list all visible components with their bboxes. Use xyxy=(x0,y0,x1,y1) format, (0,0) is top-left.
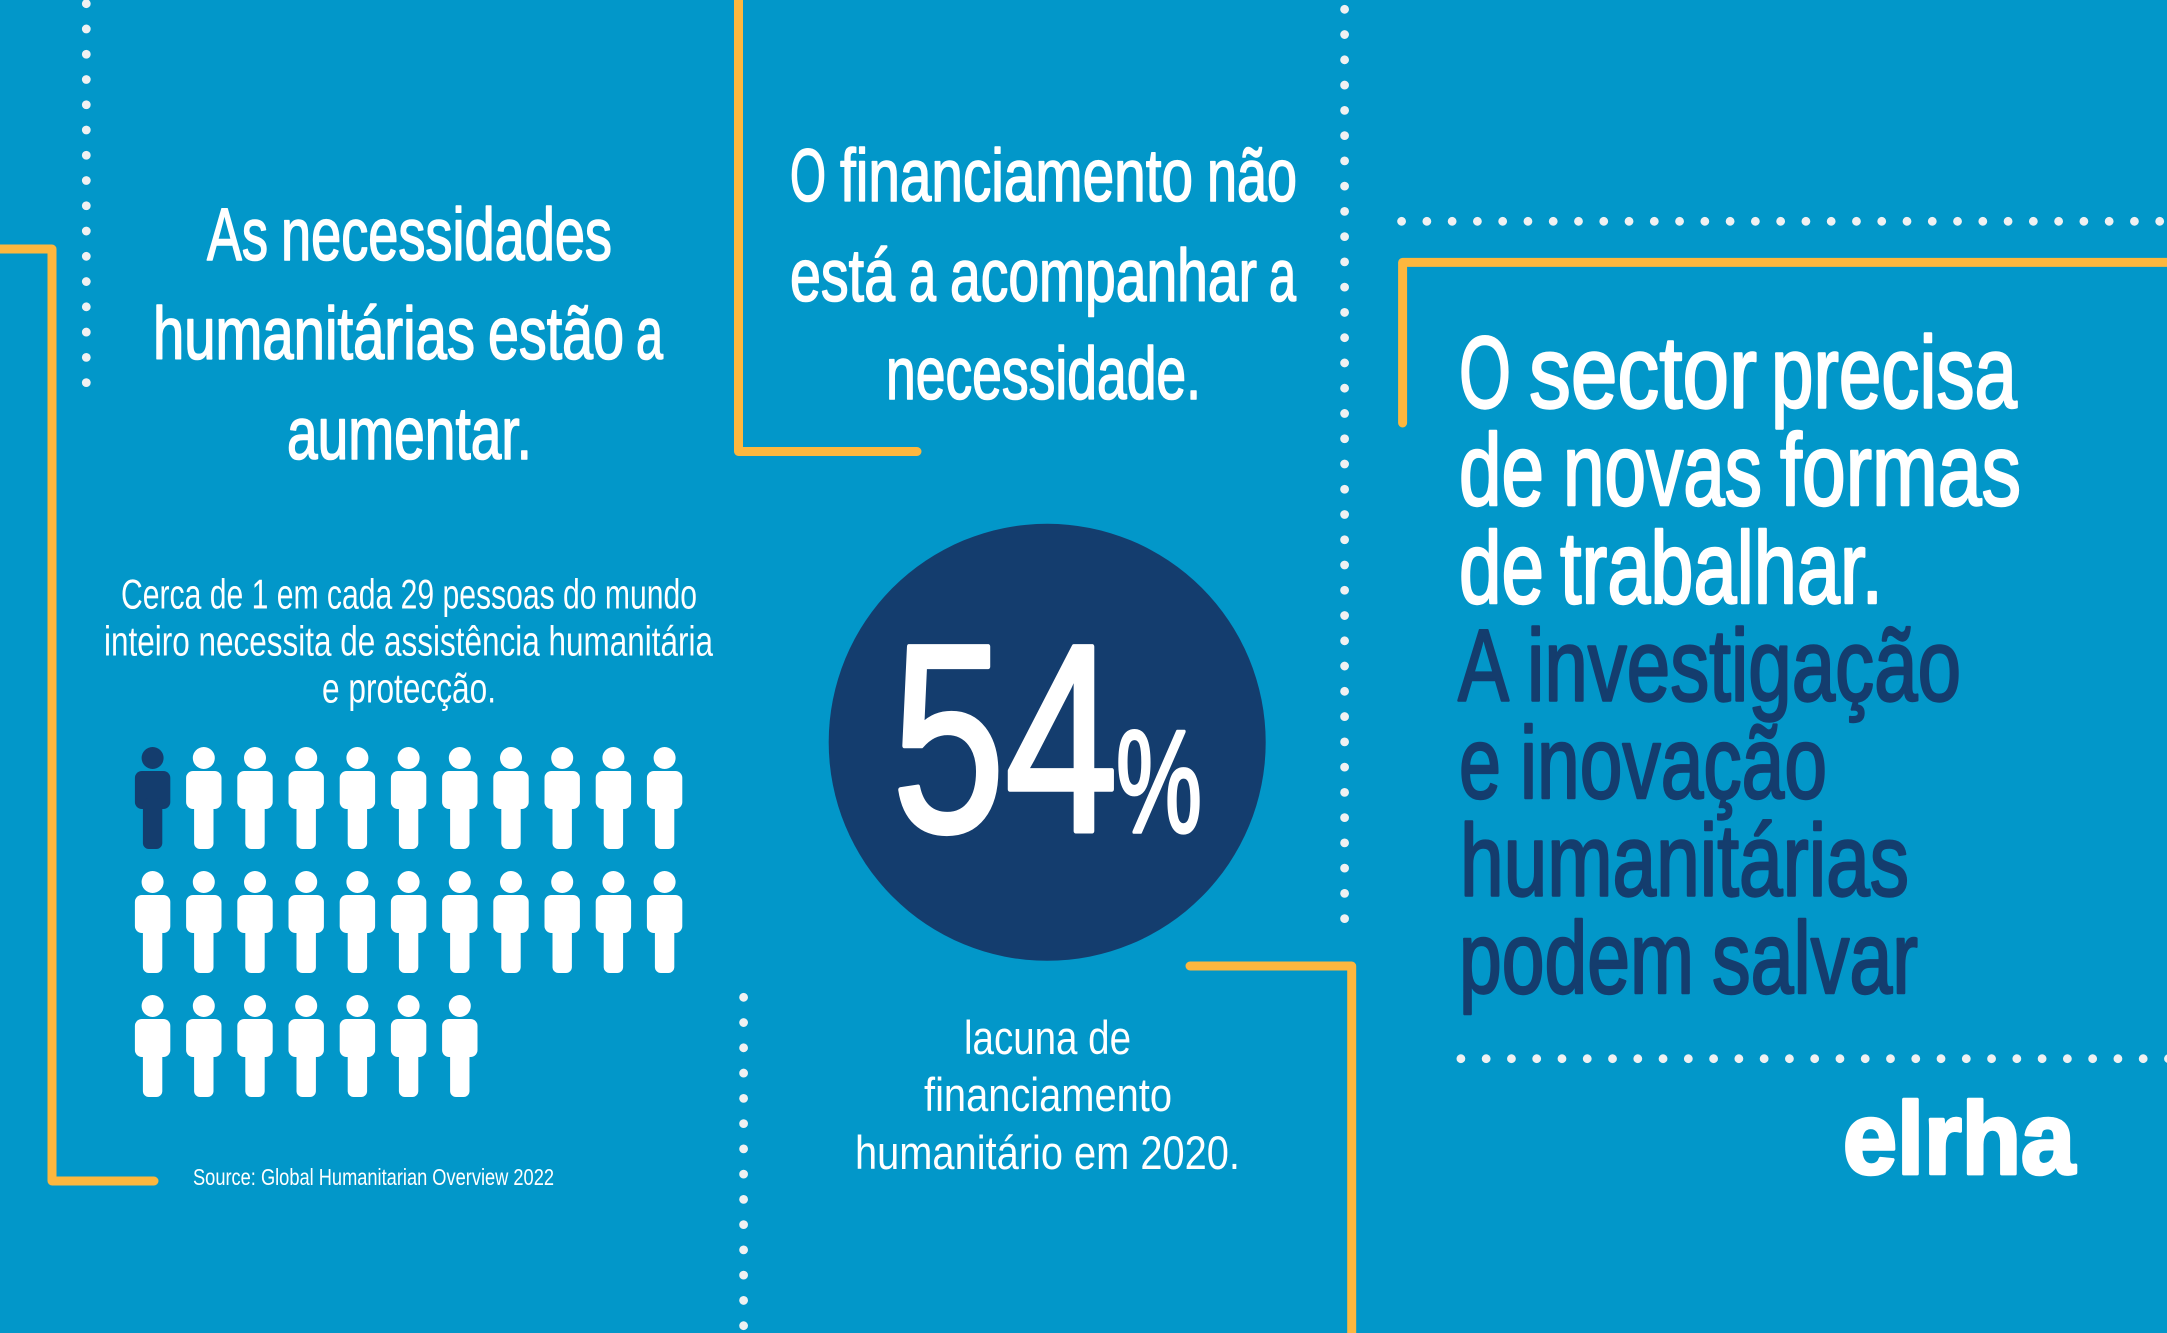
heading: sector needs new ways of working: precisa xyxy=(1771,316,2017,430)
heading: research and innovation can save: e xyxy=(1459,706,1501,820)
heading: research and innovation can save: investigação xyxy=(1527,608,1961,722)
heading: research and innovation can save: humanitárias xyxy=(1460,804,1909,918)
caption: funding gap: lacuna de xyxy=(964,1011,1131,1064)
heading: funding not keeping up: financiamento xyxy=(840,134,1193,217)
heading: funding not keeping up: está xyxy=(790,234,896,317)
caption: funding gap xyxy=(855,1011,1240,1179)
pictogram: 29 people, one highlighted xyxy=(135,747,682,1097)
stat number: 54 xyxy=(892,588,1118,888)
caption: funding gap: financiamento xyxy=(924,1068,1172,1121)
heading: sector needs new ways of working: novas xyxy=(1563,413,1762,527)
caption: funding gap: humanitário em 2020. xyxy=(855,1126,1240,1179)
frame: bottom right yellow bracket xyxy=(1190,966,1352,1333)
heading: sector needs new ways of working: sector xyxy=(1529,316,1757,430)
heading: funding not keeping up: a xyxy=(1269,234,1297,317)
frame: middle yellow bracket xyxy=(738,0,917,452)
panel: funding xyxy=(790,134,1297,1179)
text block: 1 in 29 people xyxy=(104,570,713,712)
source note: Source: Global Humanitarian Overview 2022 xyxy=(193,1164,554,1190)
heading: sector needs new ways of working xyxy=(1459,316,2021,625)
heading: needs are rising xyxy=(153,193,664,475)
heading: sector needs new ways of working: trabalhar. xyxy=(1560,511,1883,625)
heading: funding not keeping up xyxy=(790,134,1297,415)
panel: new ways of working xyxy=(1458,316,2021,1015)
heading: funding not keeping up: não xyxy=(1207,134,1297,217)
heading: sector needs new ways of working: O xyxy=(1459,316,1511,430)
stat circle: 54% xyxy=(829,524,1266,961)
heading: sector needs new ways of working: de xyxy=(1459,413,1544,527)
heading: funding not keeping up: acompanhar xyxy=(950,234,1257,317)
heading: needs are rising: necessidades xyxy=(281,193,612,276)
heading: needs are rising: As xyxy=(207,193,268,276)
heading: needs are rising: a xyxy=(636,292,664,375)
percent sign: % xyxy=(1116,700,1202,863)
heading: research and innovation can save xyxy=(1458,608,1961,1015)
text block: 1 in 29 people: Cerca de 1 em cada 29 pessoas do mundo xyxy=(121,570,697,618)
heading: research and innovation can save: inovação xyxy=(1520,706,1827,820)
icon: highlighted person xyxy=(135,747,170,849)
panel: humanitarian needs xyxy=(104,193,713,1190)
heading: funding not keeping up: a xyxy=(909,234,937,317)
frame: right yellow bracket xyxy=(1403,262,2167,423)
heading: research and innovation can save: A xyxy=(1458,608,1509,722)
text block: 1 in 29 people: e protecção. xyxy=(322,664,496,712)
heading: sector needs new ways of working: de xyxy=(1459,511,1544,625)
heading: needs are rising: estão xyxy=(488,292,624,375)
frame: left yellow bracket xyxy=(0,249,154,1181)
text block: 1 in 29 people: inteiro necessita de assistência humanitária xyxy=(104,618,713,664)
heading: sector needs new ways of working: formas xyxy=(1780,413,2021,527)
logo: elrha: elrha xyxy=(1843,1082,2076,1196)
heading: funding not keeping up: O xyxy=(790,134,826,217)
heading: research and innovation can save: salvar xyxy=(1712,901,1918,1015)
heading: needs are rising: aumentar. xyxy=(287,392,532,475)
heading: needs are rising: humanitárias xyxy=(153,292,475,375)
heading: funding not keeping up: necessidade. xyxy=(886,332,1201,415)
heading: research and innovation can save: podem xyxy=(1459,901,1694,1015)
